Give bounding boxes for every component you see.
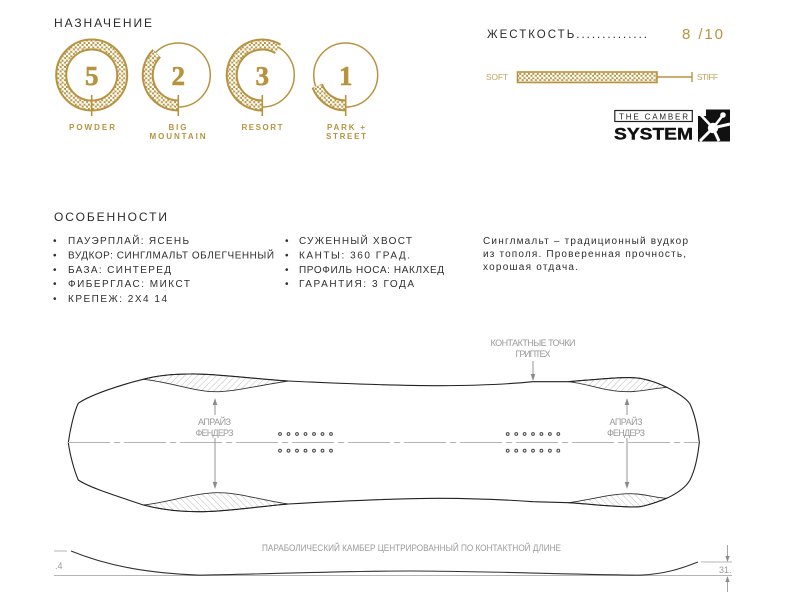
camber caption: ПАРАБОЛИЧЕСКИЙ КАМБЕР ЦЕНТРИРОВАННЫЙ ПО КОНТАКТНОЙ ДЛИНЕ <box>262 542 561 553</box>
stiffness label: ЖЕСТКОСТЬ.............. <box>487 29 647 41</box>
center line <box>68 442 699 444</box>
callout: contact points griptech: КОНТАКТНЫЕ ТОЧКИ <box>490 338 576 348</box>
features list: column two: • <box>285 250 289 262</box>
features list: column one: • <box>53 279 57 290</box>
features list: column one: БАЗА: СИНТЕРЕД <box>68 265 171 276</box>
features list: column one: ВУДКОР: СИНГЛМАЛЬТ ОБЛЕГЧЕННЫЙ <box>68 248 274 262</box>
callout: contact points griptech: ГРИПТЕХ <box>516 349 550 359</box>
rating: big mountain <box>146 43 210 141</box>
hatched zone: nose top <box>143 374 288 392</box>
features list: column one <box>53 234 274 305</box>
camber profile side view <box>54 545 732 592</box>
snowboard top view <box>68 374 699 512</box>
rating: park and street <box>314 43 378 141</box>
callout: upright fenders left: ФЕНДЕРЗ <box>196 428 234 438</box>
rating: big mountain: 2 <box>172 61 185 91</box>
rating: big mountain: MOUNTAIN <box>150 132 206 141</box>
features list: column two <box>285 234 444 290</box>
stiffness value: 8 /10 <box>682 26 723 43</box>
logo: the camber system <box>614 110 730 144</box>
logo: the camber system: SYSTEM <box>614 124 693 144</box>
features list: column one: ФИБЕРГЛАС: МИКСТ <box>68 279 190 290</box>
features list: column one: • <box>53 236 57 247</box>
rating: resort: RESORT <box>242 123 283 132</box>
callout: upright fenders right <box>607 398 645 489</box>
features list: column two: ПРОФИЛЬ НОСА: НАКЛХЕД <box>299 265 444 276</box>
rating: powder: POWDER <box>69 123 115 132</box>
camber profile side view: 31. <box>719 565 732 575</box>
rating: resort <box>230 43 294 132</box>
features list: column two: • <box>285 265 289 276</box>
rating: powder <box>61 44 122 132</box>
binding holes: front <box>279 433 332 452</box>
callout: upright fenders right: АПРАЙЗ <box>610 416 642 427</box>
stiffness bar: STIFF <box>697 72 718 82</box>
description text: хорошая отдача. <box>483 262 578 273</box>
rating: resort: 3 <box>256 61 269 91</box>
hatched zone: tail top <box>568 378 667 392</box>
features list: column one: ПАУЭРПЛАЙ: ЯСЕНЬ <box>68 234 189 247</box>
callout: upright fenders left: АПРАЙЗ <box>198 416 231 427</box>
rating: park and street: STREET <box>326 132 366 141</box>
rating: big mountain: BIG <box>168 123 186 132</box>
rating: park and street: 1 <box>339 61 352 91</box>
description text <box>483 236 688 273</box>
rating: powder: 5 <box>85 61 98 91</box>
features list: column one: КРЕПЕЖ: 2Х4 14 <box>68 294 167 305</box>
features list: column two: ГАРАНТИЯ: 3 ГОДА <box>299 279 414 290</box>
features list: column two: • <box>285 279 289 290</box>
features list: column one: • <box>53 265 57 276</box>
description text: Синглмальт – традиционный вудкор <box>483 236 688 247</box>
features list: column two: КАНТЫ: 360 ГРАД. <box>299 250 410 262</box>
features list: column two: • <box>285 236 289 247</box>
callout: contact points griptech <box>490 338 576 381</box>
callout: upright fenders left <box>196 398 234 489</box>
stiffness bar: SOFT <box>486 72 508 82</box>
heading: назначение: НАЗНАЧЕНИЕ <box>54 16 152 30</box>
rating: park and street: PARK + <box>327 123 365 132</box>
stiffness bar <box>486 72 718 82</box>
logo: the camber system: THE CAMBER <box>619 112 688 121</box>
features list: column two: СУЖЕННЫЙ ХВОСТ <box>299 234 412 247</box>
hatched zone: nose bottom <box>143 493 288 512</box>
features list: column one: • <box>53 250 57 262</box>
description text: из тополя. Проверенная прочность, <box>483 249 686 260</box>
callout: upright fenders right: ФЕНДЕРЗ <box>607 428 645 438</box>
camber profile side view: .4 <box>55 561 63 571</box>
hatched zone: tail bottom <box>568 494 667 507</box>
heading: особенности: ОСОБЕННОСТИ <box>54 210 167 224</box>
board outline <box>68 374 699 512</box>
features list: column one: • <box>53 294 57 305</box>
binding holes: rear <box>506 433 560 452</box>
